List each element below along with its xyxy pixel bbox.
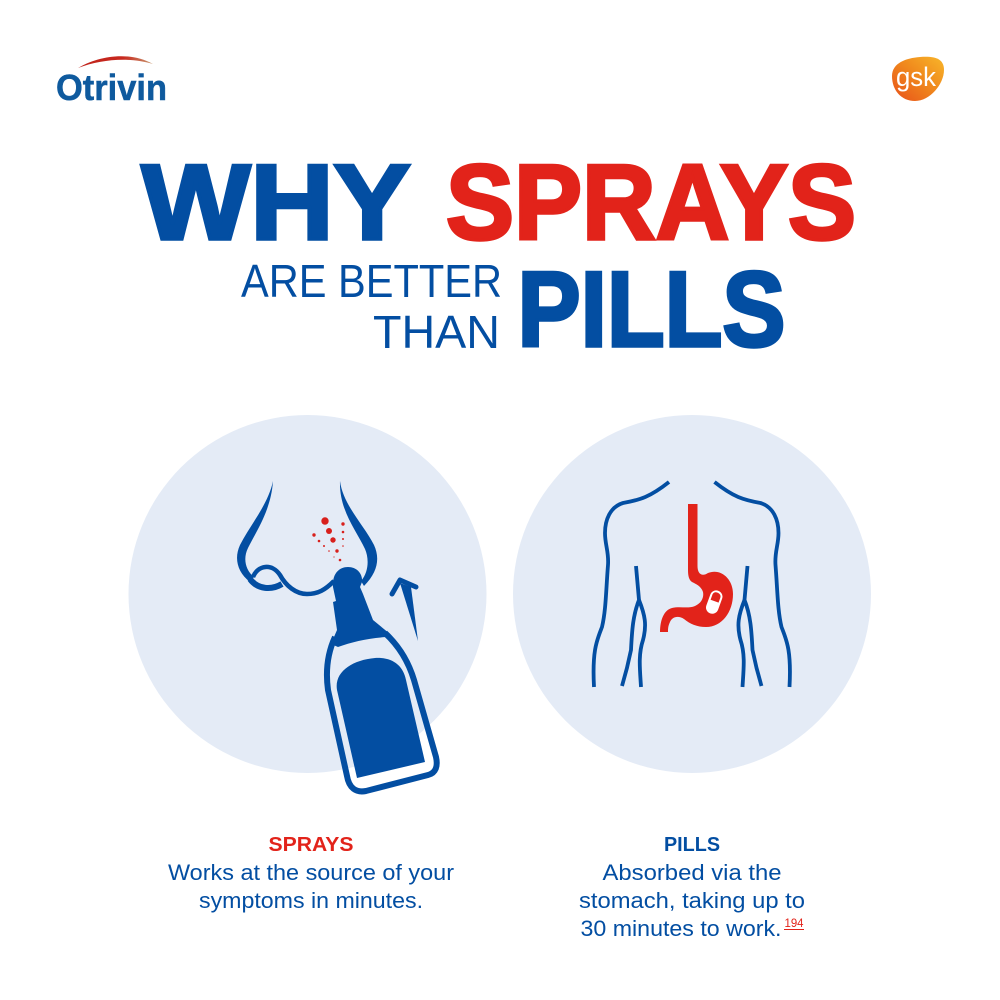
logo: Otrivin: Otrivin [56,67,167,108]
title line: pills: PILLS [518,249,786,369]
body line 1: Absorbed via the [602,860,782,885]
logo: GSK [892,57,944,101]
body line 2: stomach, taking up to [579,888,805,913]
text block: sprays [168,834,455,913]
right side of torso [714,482,790,687]
icon: torso outline [594,482,790,687]
panel: sprays circle [128,415,486,773]
text block: pills [579,834,805,941]
logo: GSK: gsk [896,62,936,92]
left side of torso [594,482,669,687]
icon: nasal spray bottle [327,567,437,791]
title line: sprays: SPRAYS [446,142,856,262]
heading: sprays: SPRAYS [268,834,354,856]
icon: spray droplets [312,517,345,561]
body line 2: symptoms in minutes. [199,888,423,913]
icon: pill [704,589,724,615]
icon: nose [237,481,377,594]
title line: why: WHY [142,142,410,262]
arrow: upward [392,580,418,641]
title [142,142,856,369]
heading: pills: PILLS [664,834,720,856]
panel: pills circle [513,415,871,773]
body line 1: Works at the source of your [168,860,455,885]
icon: stomach [660,504,733,632]
body line 3: 30 minutes to work. [580,916,782,941]
footnote reference: 194 [784,916,804,930]
title line: than: THAN [373,306,500,358]
title line: are better: ARE BETTER [241,255,502,307]
